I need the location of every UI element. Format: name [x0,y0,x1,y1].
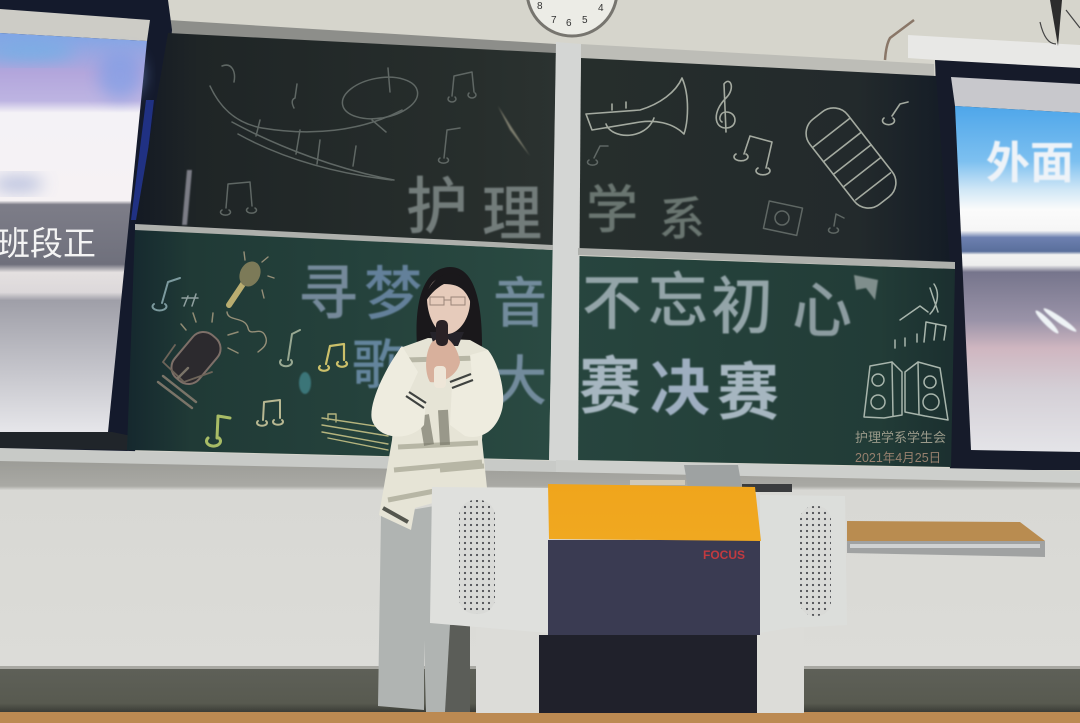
face [427,276,470,334]
chalk heading: never forget: 不 [582,270,642,337]
orange top [548,484,761,541]
treble clef drawing [716,81,735,132]
blackboard lower right: 初 [711,273,773,342]
microphone [434,320,448,388]
trumpet drawing [586,78,688,135]
speakers drawing [864,362,948,420]
chalk heading: nursing: 理 [482,181,542,248]
sleeve cuffs [406,374,473,408]
drum drawing [799,101,903,215]
music staff drawing [210,86,402,180]
blackboard upper right [578,58,950,263]
chalk heading: final round: 赛 [579,353,641,422]
note icons [152,278,388,450]
wall clock: 8 [537,1,543,12]
wall clock: 4 [598,3,604,14]
chalk heading: department: 学 [586,182,638,240]
hair [416,267,482,350]
note drawings [734,136,772,175]
right speaker grille [800,506,831,616]
small microphone drawing [227,252,274,352]
note icons [292,84,297,108]
right sleeve [450,350,503,437]
hands [426,336,460,382]
chalk heading: nursing: 护 [406,173,468,242]
podium right door [760,495,847,633]
blackboard lower right: 决 [650,356,710,423]
lower wall [0,461,1080,670]
blackboard lower right: 心 [792,278,852,345]
blackboard lower left: 梦 [364,262,422,327]
plaid stripes [388,358,484,500]
microphone drawing [158,313,238,408]
side table [847,521,1045,557]
blackboard lower left: 歌 [352,336,406,396]
music notes drawing [895,284,946,348]
podium left door [430,487,549,633]
blackboard lower left: 音 [493,274,547,334]
cardigan body [379,338,488,530]
blackboard lower right: 赛 [717,359,779,428]
blackboard lower left: 大 [493,352,547,412]
dado rail and floor [0,666,1080,723]
blackboard upper left [135,33,556,248]
wall clock [527,0,617,36]
neck [430,332,464,346]
blackboard frame rails [0,42,1080,483]
trousers [378,500,470,712]
left speaker grille [459,500,495,614]
monitor on desk [684,465,742,488]
left projector screen [0,0,172,452]
speaker box drawing [763,201,803,235]
chalk heading: nursing [406,173,542,248]
presenter [371,267,503,712]
wall clock: 6 [566,18,572,29]
brand label: FOCUS [703,548,745,562]
wall clock: 7 [551,15,557,26]
chalk heading: dream: 寻 [298,260,358,327]
blackboard lower right: 2021年4月25日 [855,451,941,465]
podium centre panel [548,540,760,635]
chalk smudge [299,372,311,394]
right projector screen [935,60,1080,470]
blackboard upper right: 系 [659,193,705,245]
signature: 护理学系学生会 [855,430,946,445]
wall clock: 5 [582,15,588,26]
wall fixture right [885,0,1080,70]
blackboard lower left [127,229,553,460]
fringe [424,273,473,310]
blackboard lower right: 忘 [648,268,708,335]
glasses [430,297,465,305]
chalk block [854,275,878,300]
screen caption: 外面 [986,139,1074,188]
podium base [476,628,539,713]
podium [430,465,847,713]
left sleeve [371,346,426,436]
blackboard lower right [575,256,955,467]
blackboard upper rails [168,20,934,78]
